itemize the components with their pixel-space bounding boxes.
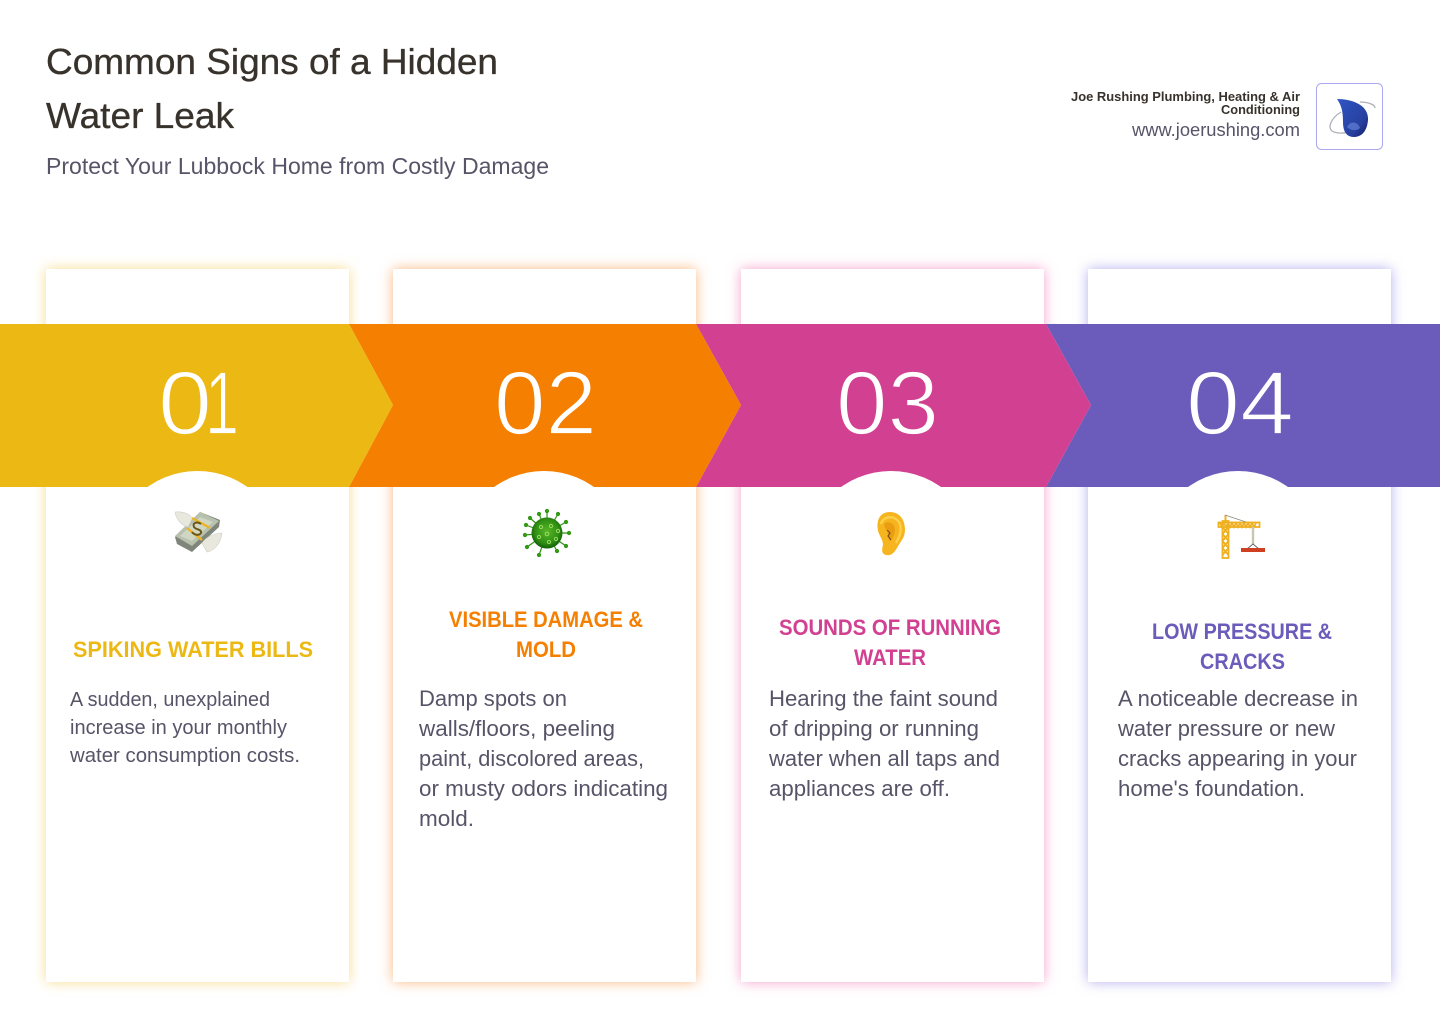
card 1 heading: SPIKING WATER BILLS (73, 637, 313, 662)
arrow band (0, 324, 1440, 487)
card 4 heading (1152, 619, 1332, 674)
number 01 (158, 354, 239, 454)
icon: construction crane (1218, 515, 1265, 558)
card 4 text (1117, 686, 1358, 801)
logo: water drop (1316, 84, 1382, 150)
card 4 text: water pressure or new (1117, 716, 1335, 741)
arrow 2 orange (349, 324, 741, 487)
card 2 text: mold. (419, 806, 474, 831)
glow behind cards (46, 269, 1391, 982)
number 04: 04 (1186, 354, 1294, 454)
card 2 text (418, 686, 668, 831)
company name and website: Joe Rushing Plumbing, Heating & Air (1071, 89, 1300, 104)
card 3 text: water when all taps and (768, 746, 1000, 771)
card 4 text: cracks appearing in your (1118, 746, 1357, 771)
subtitle: Protect Your Lubbock Home from Costly Damage (46, 153, 549, 179)
arrow 1 yellow (0, 324, 393, 487)
card 3 heading (779, 615, 1001, 670)
company name and website: Conditioning (1221, 102, 1300, 117)
card 1 text: water consumption costs. (69, 744, 300, 767)
card 2 heading (449, 607, 643, 662)
card 4 heading: LOW PRESSURE & (1152, 619, 1332, 644)
card 4 heading: CRACKS (1200, 649, 1285, 674)
panel: card 3 (741, 269, 1044, 982)
header: title: Water Leak (46, 95, 235, 136)
card 3 heading: SOUNDS OF RUNNING (779, 615, 1001, 640)
number 02: 02 (494, 354, 597, 454)
panel: card 4 (1088, 269, 1391, 982)
card 3 text (768, 686, 1000, 801)
number 01: 1 (205, 354, 239, 454)
card 2 heading: MOLD (516, 637, 576, 662)
arrow 3 pink (696, 324, 1091, 487)
card 3 text: appliances are off. (769, 776, 950, 801)
number 01: 0 (158, 354, 212, 454)
card 2 text: Damp spots on (419, 686, 567, 711)
card 2 text: or musty odors indicating (419, 776, 668, 801)
icon: green microbe (524, 510, 570, 556)
company name and website (1071, 89, 1300, 140)
card 3 heading: WATER (854, 645, 926, 670)
card 4 text: A noticeable decrease in (1118, 686, 1358, 711)
header: title (46, 41, 498, 136)
icon: flying money (175, 512, 222, 552)
card 4 text: home's foundation. (1118, 776, 1305, 801)
card 1 text: A sudden, unexplained (70, 688, 270, 711)
header: title: Common Signs of a Hidden (46, 41, 498, 82)
panel: card 2 (393, 269, 696, 982)
arrow 4 purple (1046, 324, 1440, 487)
card 2 text: walls/floors, peeling (418, 716, 615, 741)
icon: ear (878, 512, 905, 555)
card 3 text: Hearing the faint sound (769, 686, 998, 711)
card 1 text: increase in your monthly (70, 716, 288, 739)
card 1 text (69, 688, 300, 767)
card 3 text: of dripping or running (769, 716, 979, 741)
white arc tabs (148, 471, 1288, 487)
panel: card 1 (46, 269, 349, 982)
number 03: 03 (836, 354, 939, 454)
card 2 text: paint, discolored areas, (419, 746, 644, 771)
company name and website: www.joerushing.com (1131, 120, 1300, 140)
card 2 heading: VISIBLE DAMAGE & (449, 607, 643, 632)
